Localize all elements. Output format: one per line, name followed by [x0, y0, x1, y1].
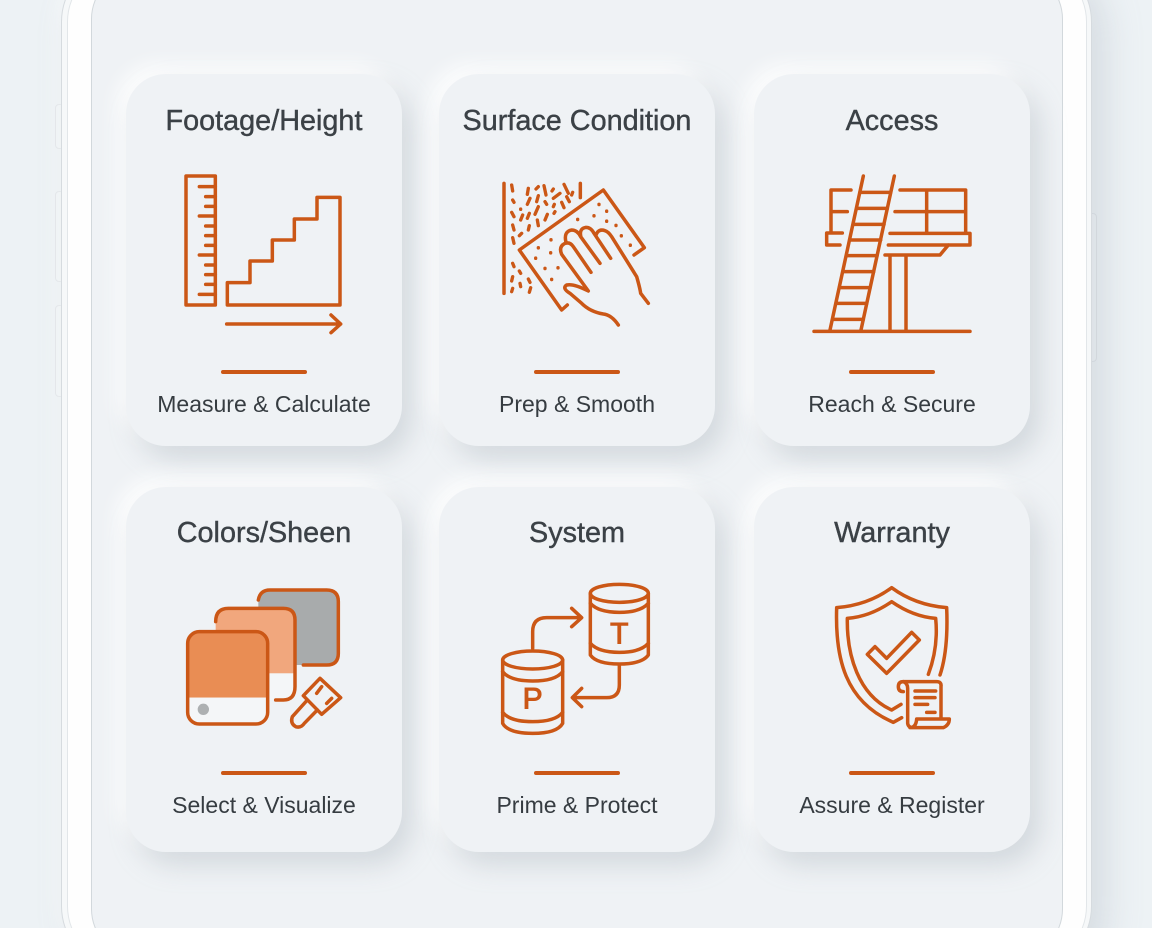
caption: Prep & Smooth: [499, 391, 655, 417]
caption: Measure & Calculate: [157, 391, 371, 417]
panel: Colors/Sheen: [126, 487, 402, 852]
icon: primer and topcoat cans: [500, 582, 650, 736]
panel: Access: [754, 74, 1030, 446]
panel: System: [439, 487, 715, 852]
side button: left middle: [55, 191, 63, 282]
panel: Warranty: [754, 487, 1030, 852]
heading: Surface Condition: [463, 105, 691, 137]
caption: Prime & Protect: [496, 792, 658, 818]
divider: [221, 771, 307, 775]
caption: Reach & Secure: [808, 391, 976, 417]
caption: Select & Visualize: [172, 792, 356, 818]
divider: [849, 370, 935, 374]
icon: ruler and stairs: [184, 174, 342, 334]
panel: Footage/Height: [126, 74, 402, 446]
icon: primer and topcoat cans: P: [523, 682, 543, 715]
heading: Footage/Height: [166, 105, 362, 137]
panel: Surface Condition: [439, 74, 715, 446]
side button: left lower: [55, 305, 63, 397]
heading: Colors/Sheen: [177, 517, 351, 549]
heading: Warranty: [834, 517, 950, 549]
icon: hand sanding surface: [502, 182, 650, 327]
icon: ladder and scaffold: [812, 174, 972, 334]
divider: [534, 771, 620, 775]
side button: left upper: [55, 104, 63, 149]
caption: Assure & Register: [799, 792, 985, 818]
heading: System: [529, 517, 625, 549]
icon: shield and warranty scroll: [834, 586, 952, 730]
divider: [849, 771, 935, 775]
side button: right: [1090, 213, 1097, 362]
icon: primer and topcoat cans: T: [610, 617, 628, 650]
divider: [534, 370, 620, 374]
icon: colour swatches and brush: [186, 588, 342, 729]
heading: Access: [846, 105, 938, 137]
divider: [221, 370, 307, 374]
